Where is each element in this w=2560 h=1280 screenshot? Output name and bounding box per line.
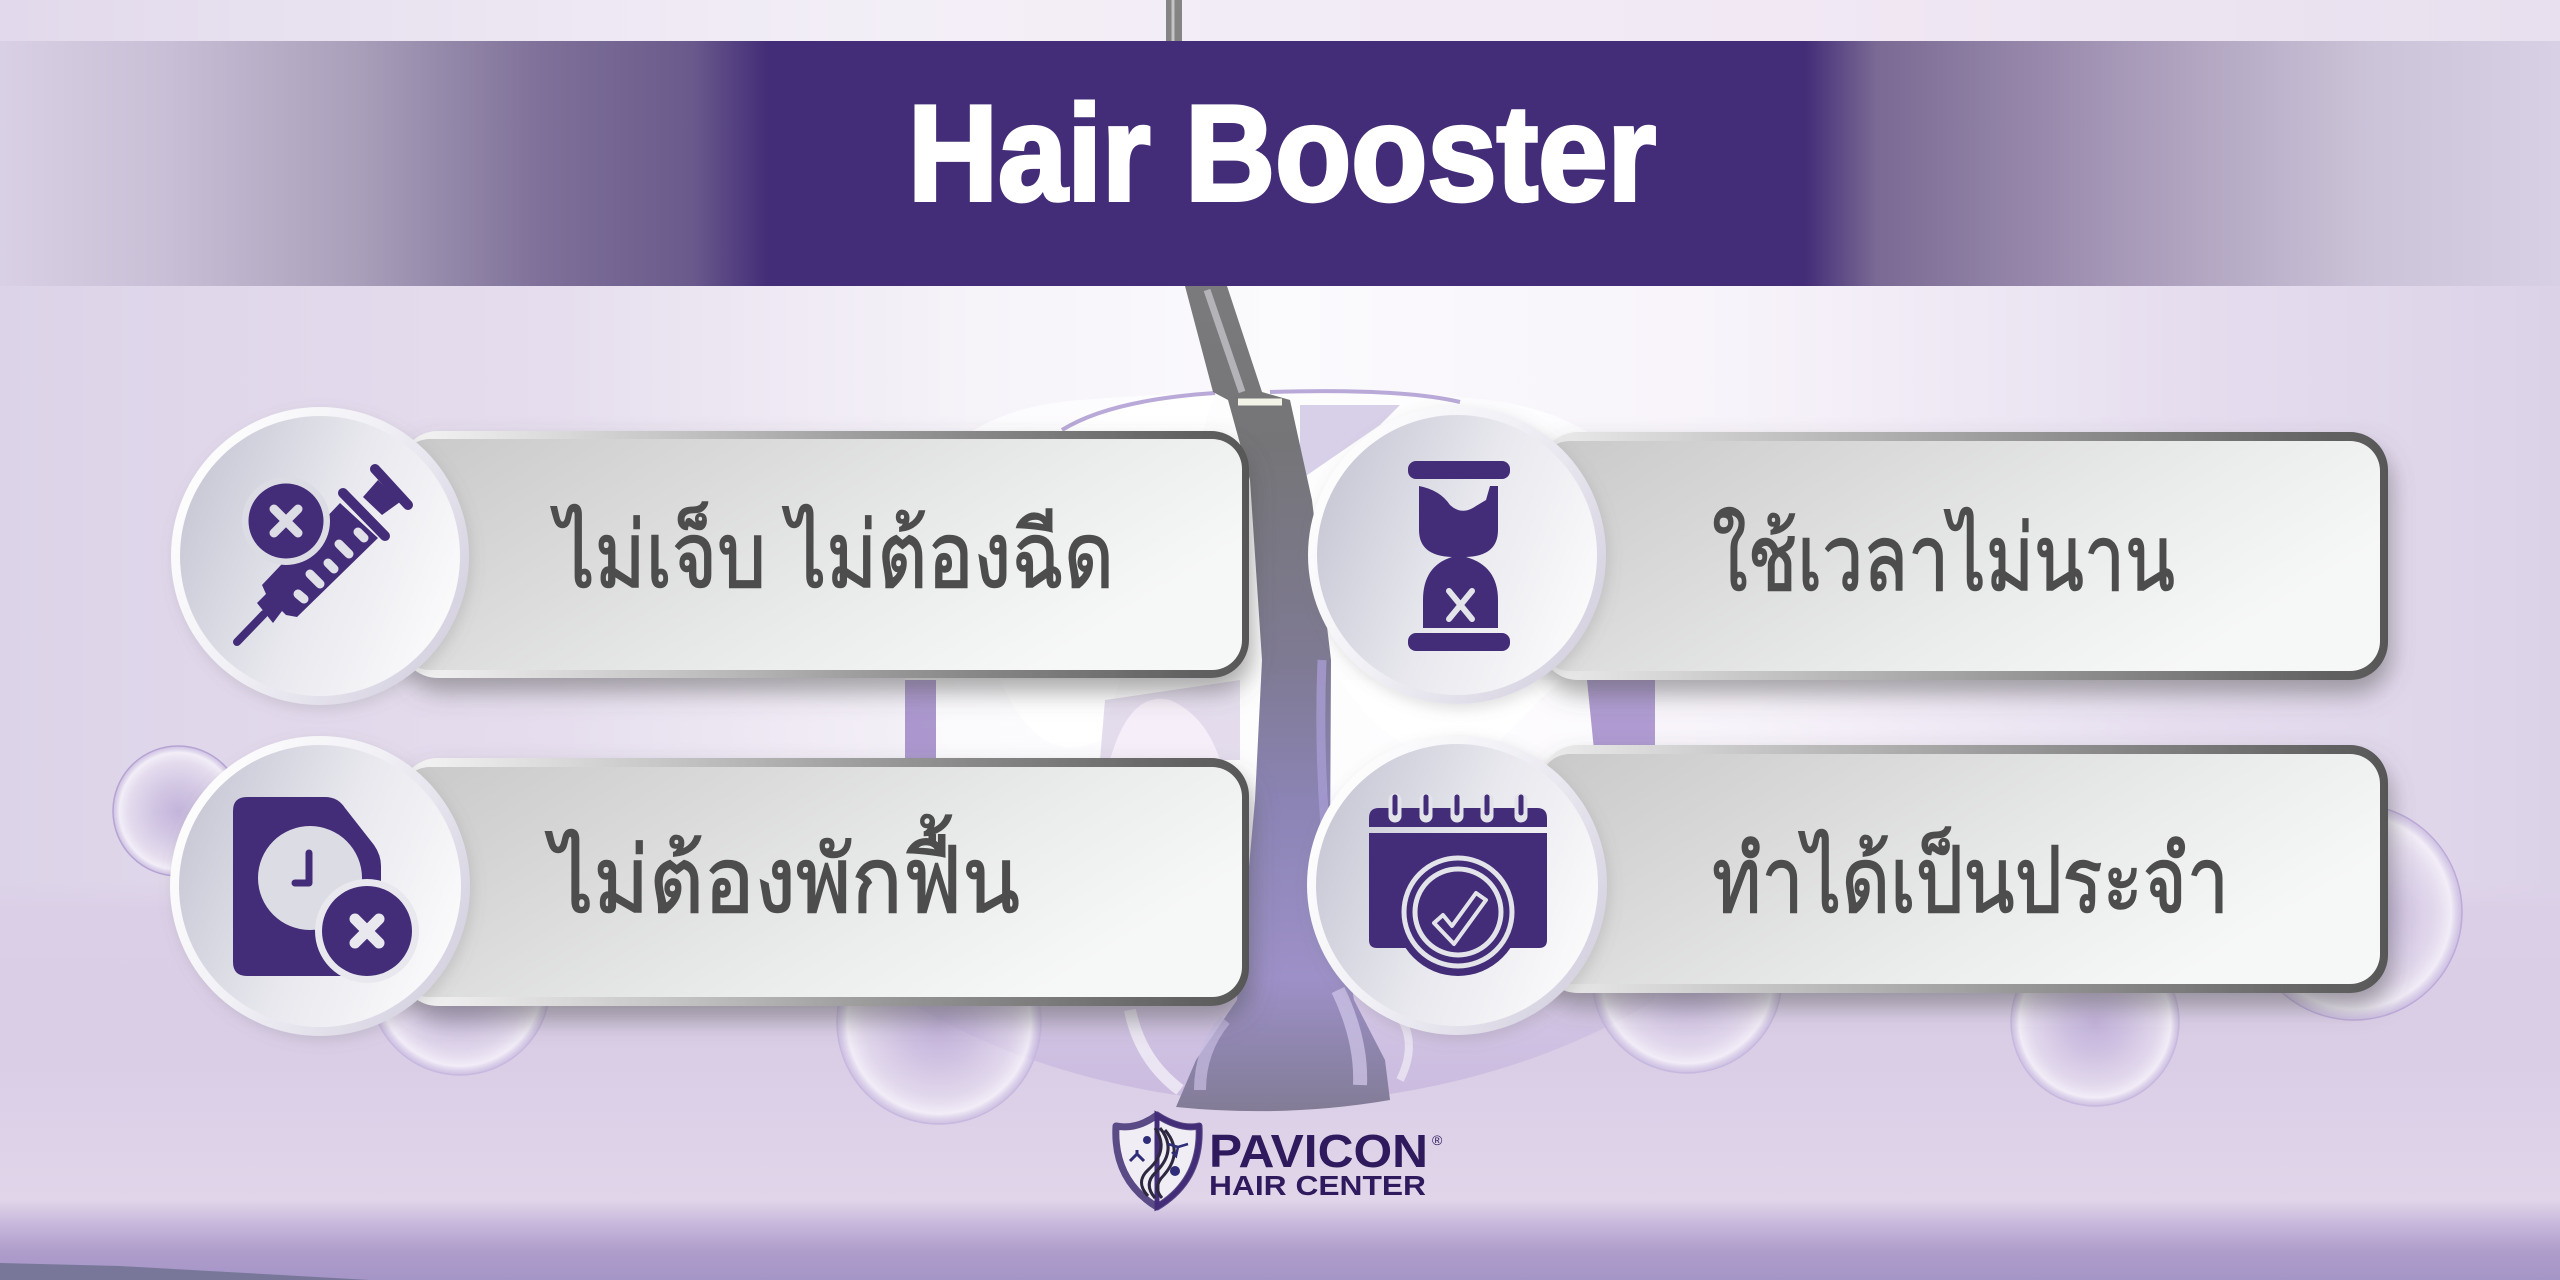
- logo wordmark: PAVICON: [1209, 1125, 1428, 1177]
- title: Hair Booster: [908, 77, 1656, 229]
- card text: regularly: ทำได้เป็นประจำ: [1712, 826, 2229, 932]
- icon disc: calendar: [1307, 735, 1607, 1035]
- icon: clock with cross: [233, 797, 419, 983]
- icon: hourglass with cross: [1408, 461, 1510, 651]
- logo shield: [1116, 1115, 1199, 1207]
- icon disc: hourglass: [1308, 406, 1606, 704]
- bubble: lower centre left: [837, 920, 1041, 1124]
- card text: short time: ใช้เวลาไม่นาน: [1712, 508, 2175, 610]
- hair strand and bulb: [1166, 0, 1390, 1111]
- icon: crossed syringe: [237, 469, 408, 642]
- registered mark: ®: [1432, 1132, 1443, 1148]
- logo subtitle: HAIR CENTER: [1209, 1170, 1426, 1201]
- card: short time: [1540, 432, 2388, 680]
- icon disc: syringe: [171, 407, 469, 705]
- icon disc: clock: [170, 736, 470, 1036]
- card: no pain, no injection: [400, 431, 1249, 678]
- bubble: lower left: [370, 895, 550, 1075]
- card text: no downtime: ไม่ต้องพักฟื้น: [545, 814, 1020, 932]
- icon: calendar with check: [1369, 797, 1547, 976]
- card text: no pain: ไม่เจ็บ ไม่ต้องฉีด: [550, 501, 1114, 607]
- bubble: lower right: [2011, 938, 2179, 1106]
- bubble: far right: [2246, 804, 2462, 1020]
- logo: Pavicon Hair Center: [1116, 1115, 1443, 1207]
- card: no downtime: [400, 758, 1249, 1006]
- glass droplet behind hair: [905, 391, 1655, 1105]
- bubble: lower centre right: [1592, 883, 1782, 1073]
- card: can be done regularly: [1540, 745, 2388, 993]
- title banner: [0, 41, 2560, 286]
- bubble: far left: [113, 746, 243, 876]
